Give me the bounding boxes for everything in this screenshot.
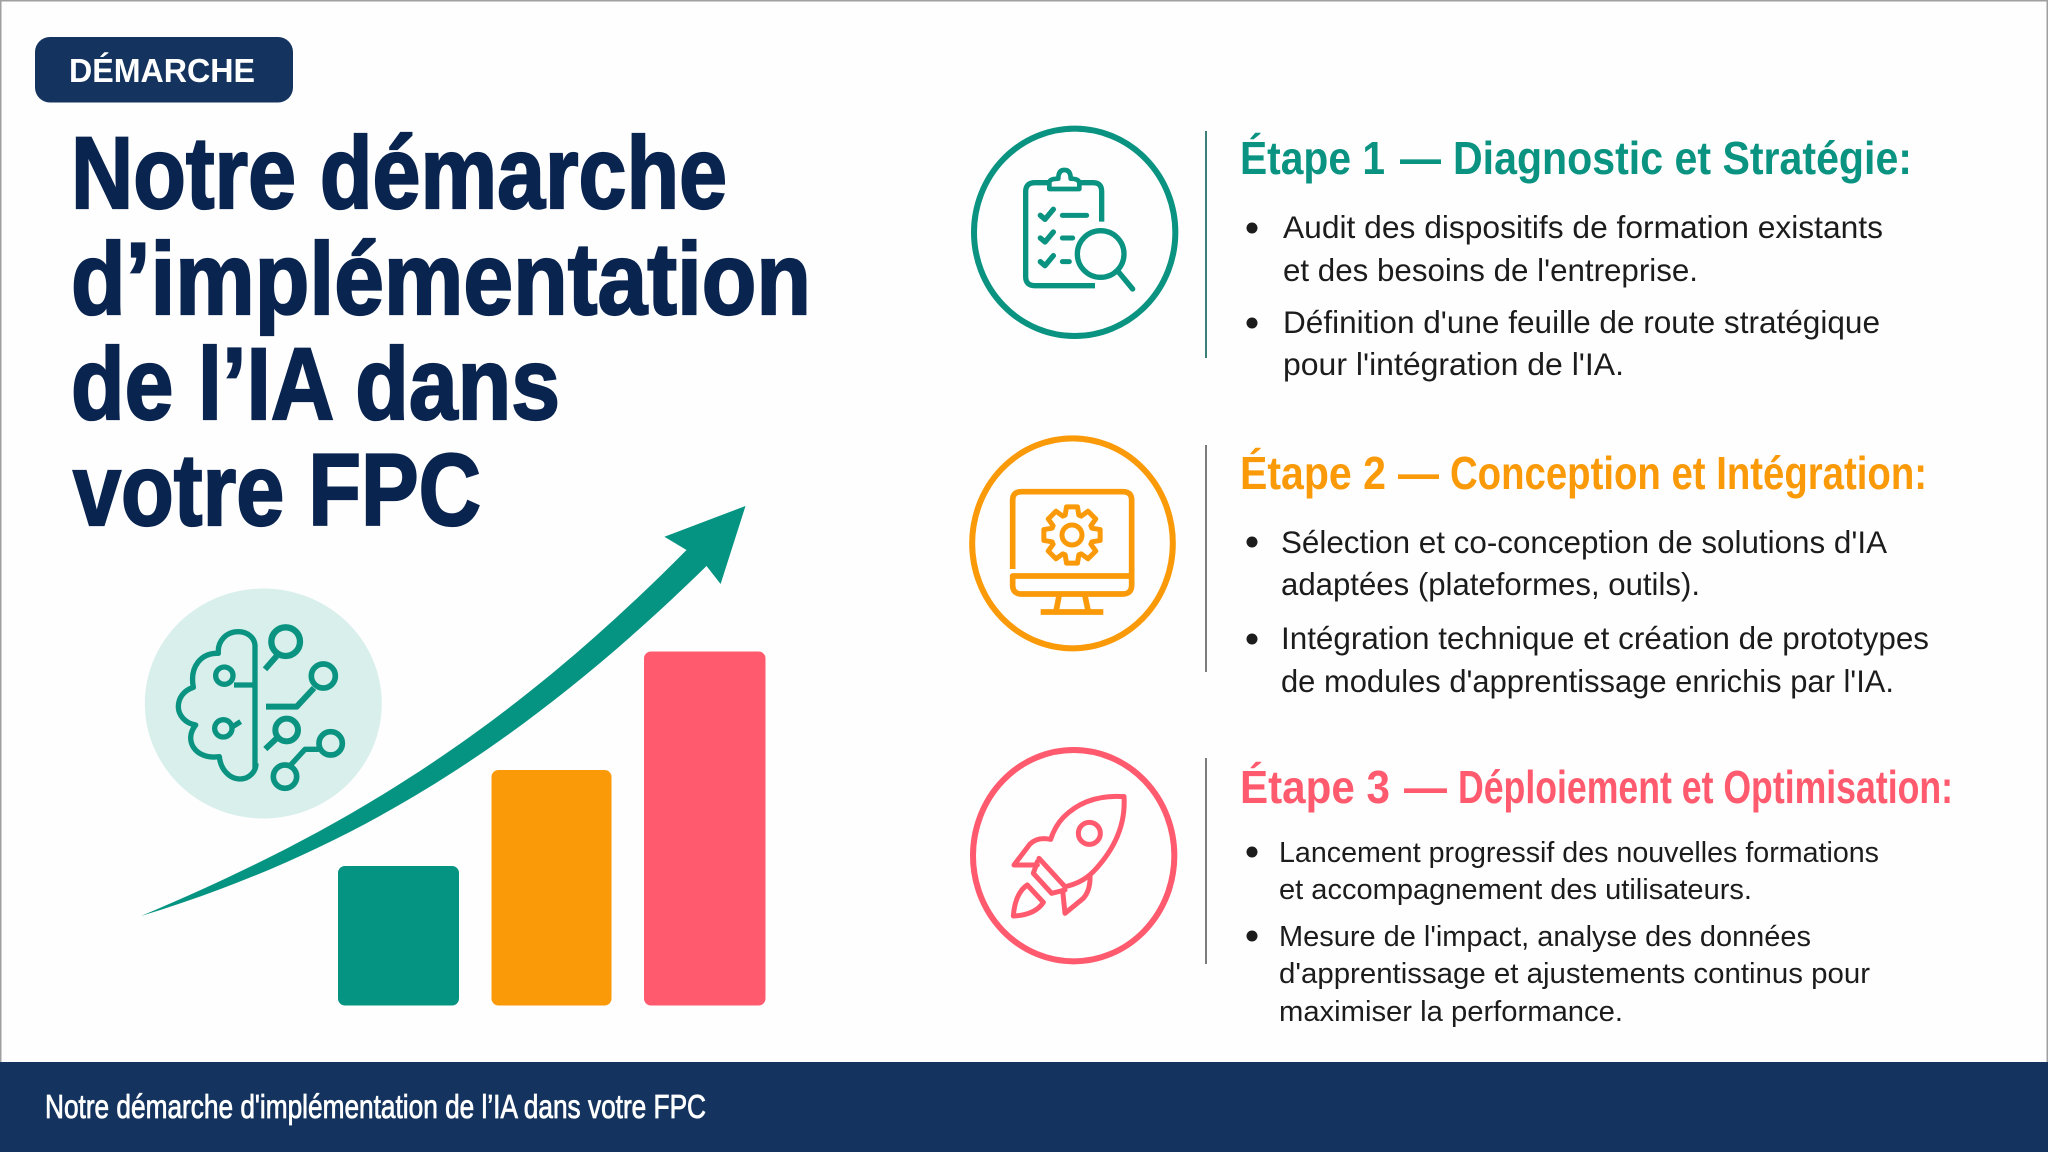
heading: step 3: — xyxy=(1404,761,1447,813)
badge: DÉMARCHE xyxy=(35,37,293,102)
arrow: rising trend xyxy=(141,506,746,916)
bullets: step 3: maximiser la performance. xyxy=(1279,996,1623,1028)
bullets: step 2 xyxy=(1246,524,1929,699)
title: d’implémentation xyxy=(71,222,811,336)
bullets: step 3: Lancement progressif des nouvelles formations xyxy=(1279,837,1879,869)
heading: step 2: Étape 2 xyxy=(1240,447,1386,499)
icon: rocket xyxy=(973,750,1174,961)
heading: step 2: Conception et Intégration: xyxy=(1450,447,1927,499)
bullets: step 3: Mesure de l'impact, analyse des données xyxy=(1279,921,1811,953)
title xyxy=(71,116,811,547)
bullets: step 1 xyxy=(1246,209,1883,382)
divider: step 2 xyxy=(1205,445,1207,672)
divider: step 3 xyxy=(1205,758,1207,964)
icon: AI brain in a pale circle xyxy=(145,588,382,818)
footer band: Notre démarche d'implémentation de l’IA dans votre FPC xyxy=(45,1088,706,1125)
icon: clipboard with magnifier xyxy=(974,129,1175,336)
title: Notre démarche xyxy=(71,116,727,230)
bullets: step 2: de modules d'apprentissage enrichis par l'IA. xyxy=(1281,663,1894,699)
bullets: step 3: et accompagnement des utilisateurs. xyxy=(1279,874,1752,906)
heading: step 1: Étape 1 xyxy=(1240,132,1385,184)
bullets: step 3 xyxy=(1246,837,1879,1028)
bullets: step 2: Sélection et co-conception de solutions d'IA xyxy=(1281,524,1887,560)
bullets: step 2: adaptées (plateformes, outils). xyxy=(1281,566,1700,602)
heading: step 2 xyxy=(1240,447,1927,499)
title: de l’IA dans xyxy=(71,327,560,441)
bullets: step 1: et des besoins de l'entreprise. xyxy=(1283,252,1698,288)
bar chart xyxy=(338,652,766,1006)
heading: step 1 xyxy=(1240,132,1912,184)
heading: step 3: Étape 3 xyxy=(1240,761,1390,813)
bullets: step 3: d'apprentissage et ajustements continus pour xyxy=(1279,958,1870,990)
heading: step 1: Diagnostic et Stratégie: xyxy=(1453,132,1912,184)
panel: step 2 xyxy=(972,438,1929,699)
icon: monitor with gear xyxy=(972,438,1173,648)
panel: step 1 xyxy=(974,129,1912,382)
heading: step 2: — xyxy=(1398,447,1439,499)
divider: step 1 xyxy=(1205,131,1207,358)
bullets: step 1: Audit des dispositifs de formation existants xyxy=(1283,209,1883,245)
bullets: step 1: pour l'intégration de l'IA. xyxy=(1283,346,1624,382)
heading: step 1: — xyxy=(1400,132,1441,184)
bullets: step 1: Définition d'une feuille de route stratégique xyxy=(1283,304,1880,340)
heading: step 3 xyxy=(1240,761,1953,813)
footer band xyxy=(0,1062,2048,1152)
badge: DÉMARCHE: DÉMARCHE xyxy=(69,52,255,89)
title: votre FPC xyxy=(73,433,481,547)
bullets: step 2: Intégration technique et création de prototypes xyxy=(1281,620,1929,656)
panel: step 3 xyxy=(973,750,1953,1028)
